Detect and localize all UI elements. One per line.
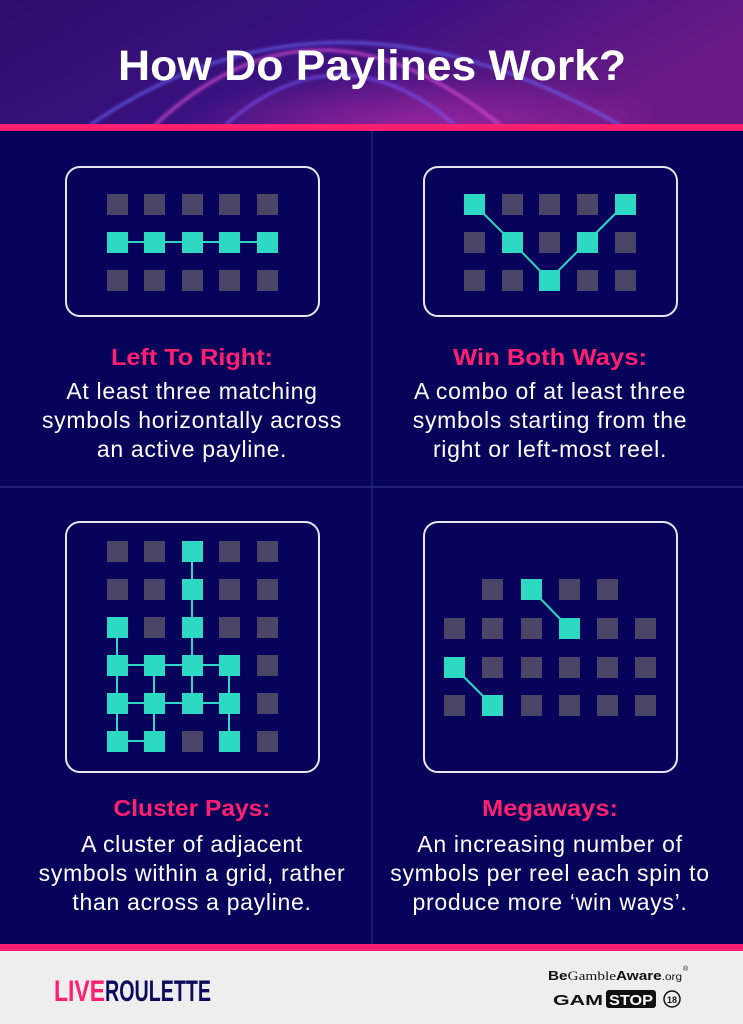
text: cluster pays: A cluster of adjacent: [81, 831, 303, 857]
panel: cluster pays: [39, 522, 345, 915]
logo: gamstop 18+: GAM: [553, 992, 603, 1009]
panel: win both ways: [413, 167, 687, 462]
logo: begambleaware: ®: [683, 965, 689, 973]
pink bar top: [0, 124, 743, 131]
logo: live roulette: LIVE: [54, 975, 105, 1008]
pink bar bottom: [0, 944, 743, 951]
title: How Do Paylines Work?: [118, 42, 626, 90]
heading: win both ways: Win Both Ways:: [453, 344, 647, 370]
text: left to right: At least three matching: [66, 378, 318, 404]
text: left to right: an active payline.: [97, 436, 287, 462]
heading: left to right: Left To Right:: [111, 344, 273, 370]
panel: left to right: [42, 167, 342, 462]
logo: gamstop 18+: [553, 990, 680, 1009]
heading: megaways: Megaways:: [482, 795, 618, 821]
panel: megaways: [390, 522, 710, 915]
text: left to right: symbols horizontally across: [42, 407, 342, 433]
icon: left to right grid: [66, 167, 319, 316]
logo: begambleaware: BeGamble Aware .org: [548, 968, 682, 983]
logo: gamstop 18+: 18: [667, 995, 677, 1005]
text: cluster pays: symbols within a grid, rather: [39, 860, 345, 886]
logo: live roulette: [54, 975, 211, 1008]
logo: live roulette: ROULETTE: [105, 975, 211, 1008]
main background: [0, 131, 743, 944]
footer: [0, 951, 743, 1024]
text: win both ways: right or left-most reel.: [433, 436, 667, 462]
text: cluster pays: than across a payline.: [72, 889, 312, 915]
logo: gamstop 18+: STOP: [609, 992, 653, 1009]
text: megaways: symbols per reel each spin to: [390, 860, 710, 886]
heading: cluster pays: Cluster Pays:: [114, 795, 270, 821]
header background: [0, 0, 743, 125]
icon: cluster grid: [66, 522, 319, 772]
icon: megaways grid: [424, 522, 677, 772]
text: megaways: An increasing number of: [417, 831, 683, 857]
text: megaways: produce more ‘win ways’.: [412, 889, 688, 915]
icon: win both ways grid: [424, 167, 677, 316]
text: win both ways: symbols starting from the: [413, 407, 687, 433]
text: win both ways: A combo of at least three: [414, 378, 686, 404]
